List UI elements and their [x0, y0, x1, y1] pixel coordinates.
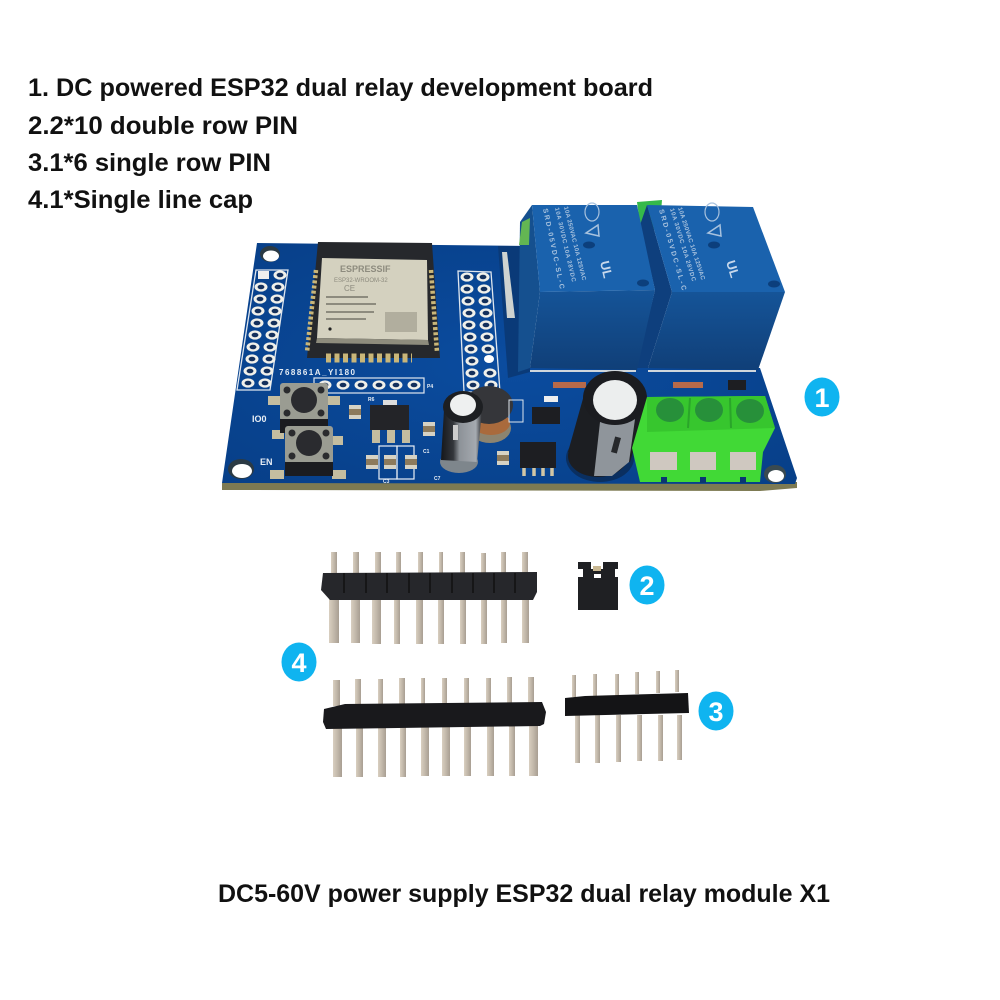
relay development board — [222, 200, 797, 491]
diodes and small parts — [509, 380, 746, 476]
badge 2: 2 — [639, 571, 655, 601]
housing — [323, 702, 546, 729]
board labels: C7 — [434, 476, 441, 482]
list item 2: 2.2*10 double row PIN — [28, 112, 298, 140]
small capacitors — [349, 405, 509, 479]
board labels: C1 — [423, 449, 430, 455]
pins — [333, 677, 538, 777]
badge 3: 3 — [708, 697, 724, 727]
module base — [307, 242, 440, 358]
jumper cap — [578, 562, 619, 610]
list item 4: 4.1*Single line cap — [28, 186, 253, 214]
P4 pin row footprint — [314, 378, 424, 393]
relay 1 markings: UL — [597, 259, 616, 280]
board labels: R6 — [368, 397, 375, 403]
module marking — [326, 264, 417, 332]
badge 4: 4 — [291, 648, 307, 678]
mounting holes — [228, 246, 786, 483]
relay 2 markings: 10A 250VAC 10A 125VAC — [676, 207, 705, 282]
badge 2 — [630, 566, 664, 604]
pcb surface — [222, 243, 797, 484]
large electrolytic capacitor — [566, 371, 647, 482]
tactile buttons — [268, 383, 346, 479]
1x6 pin header strip — [565, 670, 689, 763]
board labels — [252, 368, 441, 485]
relay 2 — [636, 203, 785, 372]
white silk strip — [502, 252, 515, 318]
2x10 pin header strip — [321, 552, 537, 644]
pins — [329, 552, 529, 644]
badge 1 — [804, 378, 840, 416]
castellated pads — [307, 270, 437, 352]
voltage regulator — [370, 400, 410, 443]
list item 3: 3.1*6 single row PIN — [28, 149, 271, 177]
terminal peak behind relays — [637, 200, 662, 240]
relay 2 markings: SRD-05VDC-SL-C — [657, 209, 687, 291]
board labels: C3 — [383, 479, 390, 485]
relay 1 markings — [541, 203, 616, 290]
relay 2 markings: 10A 30VDC 10A 28VDC — [668, 208, 696, 283]
title: contents list — [28, 74, 653, 214]
board labels: 768861A_YI180 — [279, 368, 356, 377]
relay 1 markings: 10A 250VAC 10A 125VAC — [562, 206, 586, 282]
module marking: CE — [344, 284, 355, 293]
metal shield can — [317, 258, 428, 340]
relay 2 markings — [657, 203, 743, 291]
ESP32 module — [307, 242, 440, 358]
pcb edge — [222, 482, 797, 491]
module marking: ESP32-WROOM-32 — [334, 278, 388, 284]
badge 3 — [698, 692, 734, 730]
green side connector sliver — [519, 218, 530, 245]
relay 1 markings: 10A 30VDC 10A 28VDC — [553, 207, 576, 283]
board labels: EN — [260, 457, 273, 467]
housing — [321, 572, 537, 600]
module marking: ESPRESSIF — [340, 264, 391, 274]
board labels: IO0 — [252, 414, 267, 424]
small electrolytic capacitor — [440, 391, 483, 473]
left pin header footprint — [237, 270, 288, 390]
relays — [518, 200, 785, 372]
badge 1: 1 — [814, 383, 830, 413]
board labels: P4 — [427, 384, 433, 390]
relay 1 markings: SRD-05VDC-SL-C — [541, 208, 565, 290]
right pin header footprint — [458, 271, 500, 392]
inductor — [465, 386, 513, 443]
1x10 pin header strip — [323, 677, 546, 777]
relay 1 — [518, 203, 655, 372]
badge 4 — [282, 642, 316, 682]
relay side shadow on pcb — [498, 246, 532, 378]
list item 1: 1. DC powered ESP32 dual relay development board — [28, 74, 653, 102]
pins — [572, 670, 682, 763]
housing — [565, 693, 689, 716]
green screw terminal block — [632, 396, 775, 483]
footer caption: DC5-60V power supply ESP32 dual relay module X1 — [218, 880, 830, 908]
relay 2 markings: UL — [723, 258, 743, 280]
